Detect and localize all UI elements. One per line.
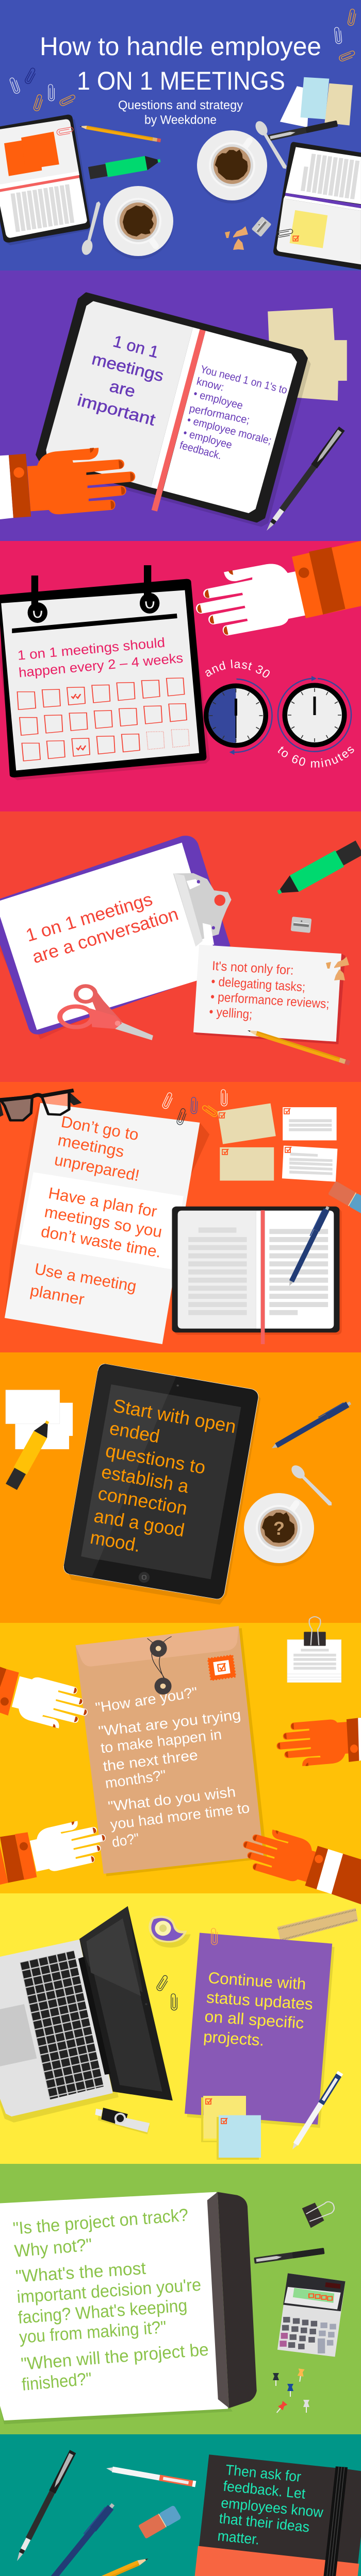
paper clip: red — [56, 127, 74, 135]
caption: to 60 minutes: to 60 minutes — [277, 746, 354, 768]
marker: yellow — [5, 1418, 54, 1490]
hand: orange bottom right — [238, 1824, 361, 1904]
book list: • employee morale; — [186, 414, 273, 447]
icon: tape dispenser — [149, 1916, 191, 1947]
push pins — [273, 2368, 309, 2415]
notebook text: matter. — [217, 2528, 260, 2548]
check marks — [219, 1108, 291, 1155]
paper text: unprepared! — [53, 1150, 141, 1184]
open book page — [0, 2192, 257, 2424]
panel: meetings are important — [0, 270, 361, 541]
book heading: meetings — [90, 349, 166, 385]
paper text: planner — [29, 1281, 86, 1309]
tablet text: and a good — [92, 1505, 186, 1541]
notebook — [182, 2454, 361, 2576]
hand: orange top right — [276, 1717, 361, 1766]
envelope text: "How are you?" — [94, 1684, 199, 1716]
paper text: Continue with — [208, 1969, 306, 1993]
notebook text: feedback. Let — [222, 2478, 306, 2502]
pen: capped — [268, 121, 338, 141]
note card — [193, 945, 346, 1044]
title: How to handle employee — [40, 32, 321, 61]
caption: and last 30: and last 30 — [205, 659, 270, 678]
calendar text: 1 on 1 meetings should — [17, 635, 166, 663]
note text — [209, 959, 330, 1022]
notebook text — [217, 2462, 324, 2548]
book heading: are — [108, 377, 137, 401]
panel: project questions — [0, 2164, 361, 2434]
hand: white top left — [0, 1667, 92, 1733]
notebook text: employees know — [220, 2495, 324, 2520]
sticky notes — [6, 1390, 73, 1449]
paper text: Have a plan for — [47, 1184, 158, 1221]
title: 1 ON 1 MEETINGS — [77, 66, 285, 95]
clipboard text: are a conversation — [30, 904, 180, 968]
sticky notes — [201, 2096, 261, 2160]
paper clips — [161, 1090, 227, 1126]
notebook text: that their ideas — [218, 2510, 310, 2535]
tablet text: mood. — [89, 1527, 142, 1556]
envelope text: "What do you wish — [107, 1784, 237, 1815]
clock: 30 minutes — [204, 679, 272, 755]
clipboard — [0, 836, 233, 1039]
panel: header — [0, 0, 361, 270]
checklist paper — [5, 1103, 209, 1344]
hand: orange — [0, 448, 135, 519]
page text: finished?" — [21, 2369, 92, 2395]
note text: • delegating tasks; — [211, 974, 306, 994]
open planner — [172, 1207, 341, 1344]
page text: Why not?" — [13, 2235, 93, 2261]
page text — [12, 2205, 209, 2395]
calendar text: happen every 2 – 4 weeks — [18, 650, 184, 680]
panel: don't go unprepared — [0, 1082, 361, 1352]
icon: calculator — [277, 2273, 346, 2357]
pencil — [247, 1028, 350, 1065]
purple paper — [185, 1933, 335, 2128]
icon: usb stick — [95, 2108, 150, 2134]
pens and pencils — [14, 2450, 196, 2576]
coffee cup: upper — [187, 121, 277, 210]
envelope text: the next three — [102, 1747, 199, 1774]
notebook text: Then ask for — [225, 2462, 302, 2485]
note text: • performance reviews; — [210, 990, 330, 1011]
paper text: status updates — [206, 1988, 314, 2013]
icon: coffee cup — [234, 1483, 324, 1573]
calendar — [0, 565, 210, 780]
open book — [37, 294, 311, 527]
page text: you from making it?" — [19, 2317, 167, 2347]
tablet text: ended — [108, 1417, 161, 1447]
icon: scissors — [60, 986, 153, 1040]
book list: You need 1 on 1's to — [199, 363, 288, 396]
book list: know: — [195, 376, 225, 394]
pen — [264, 427, 345, 533]
subtitle — [118, 98, 243, 127]
envelope text — [94, 1684, 251, 1850]
paper text: meetings so you — [43, 1202, 163, 1241]
tablet text: establish a — [100, 1461, 191, 1497]
panel: a conversation — [0, 811, 361, 1082]
paper text: Don’t go to — [60, 1112, 140, 1144]
paper clips — [156, 1975, 177, 2010]
paper text: don’t waste time. — [40, 1222, 162, 1261]
paper clips — [9, 9, 356, 112]
binder clip note — [287, 1617, 341, 1682]
marker: green — [273, 839, 361, 901]
book list: • employee — [192, 388, 244, 412]
title — [40, 32, 321, 95]
tablet text — [89, 1395, 238, 1556]
icon: pencil shavings — [225, 226, 248, 250]
envelope text: you had more time to — [109, 1800, 251, 1833]
envelope text: "What are you trying — [97, 1706, 242, 1739]
note text: • yelling; — [209, 1005, 253, 1022]
icon: pencil shavings — [326, 957, 349, 980]
laptop — [0, 1906, 173, 2123]
icon: glasses — [0, 1090, 81, 1121]
panel: ask for feedback — [0, 2434, 361, 2576]
right tablet — [273, 142, 361, 269]
book heading: 1 on 1 — [111, 332, 161, 362]
page text: important decision you're — [16, 2275, 202, 2307]
tablet text: questions to — [104, 1440, 207, 1478]
paper text — [203, 1969, 314, 2049]
book list — [178, 363, 288, 462]
pencil — [79, 125, 161, 142]
envelope — [75, 1626, 267, 1876]
spoons — [80, 119, 290, 256]
pen: capped — [254, 2248, 325, 2264]
book list: feedback. — [178, 439, 223, 462]
coffee cup: lower — [103, 186, 173, 259]
tablet — [64, 1364, 260, 1605]
book heading: important — [75, 391, 157, 429]
calendar text — [17, 635, 184, 680]
icon: spoon — [289, 1463, 335, 1509]
subtitle: Questions and strategy — [118, 98, 243, 112]
icon: sharpener — [291, 917, 311, 933]
left tablet — [0, 114, 92, 245]
paper text: projects. — [203, 2027, 265, 2049]
envelope text: do?" — [111, 1830, 140, 1850]
clock: 60 minutes — [278, 676, 351, 752]
icon: coffee cup: ? — [273, 1518, 285, 1539]
paper text: meetings — [56, 1131, 126, 1161]
note text: It's not only for: — [211, 959, 294, 978]
icon: binder clip — [302, 2202, 334, 2228]
panel: status updates — [0, 1893, 361, 2164]
book list: performance; — [188, 402, 251, 427]
clipboard text: 1 on 1 meetings — [24, 889, 155, 946]
envelope text: months?" — [104, 1767, 167, 1791]
panel: questions envelope — [0, 1623, 361, 1904]
page text: facing? What's keeping — [18, 2296, 188, 2328]
icon: ruler — [277, 1908, 358, 1942]
marker: green — [88, 154, 161, 180]
hand: white — [188, 541, 361, 646]
panel: open ended questions — [0, 1352, 361, 1682]
tablet text: Start with open — [111, 1395, 238, 1437]
envelope text: to make happen in — [100, 1726, 223, 1756]
book heading — [75, 332, 166, 429]
sticky notes — [218, 1103, 337, 1182]
panel: meeting frequency — [0, 541, 361, 811]
icon: eraser — [328, 1181, 361, 1215]
icon: postage stamp — [208, 1655, 236, 1680]
icon: sharpener — [252, 216, 271, 237]
paper text: Use a meeting — [33, 1260, 138, 1295]
paper text — [29, 1112, 163, 1309]
page text: "When will the project be — [20, 2340, 209, 2374]
book list: • employee — [182, 427, 233, 451]
tablet text: connection — [96, 1483, 189, 1519]
pen: blue — [270, 1399, 352, 1451]
paper clip: orange — [211, 1928, 217, 1945]
paper text: on all specific — [204, 2007, 304, 2032]
paper clip and check on note — [276, 229, 299, 241]
icon: eraser — [138, 2505, 182, 2539]
subtitle: by Weekdone — [144, 113, 217, 127]
clipboard clasp — [173, 873, 232, 946]
sticky notes — [268, 308, 347, 401]
sticky notes — [280, 77, 353, 127]
page text: "Is the project on track? — [12, 2205, 189, 2239]
hand: white bottom left — [0, 1817, 109, 1885]
pen: white — [290, 2071, 343, 2151]
page text: "What's the most — [15, 2259, 147, 2286]
pen: blue — [286, 1205, 331, 1287]
